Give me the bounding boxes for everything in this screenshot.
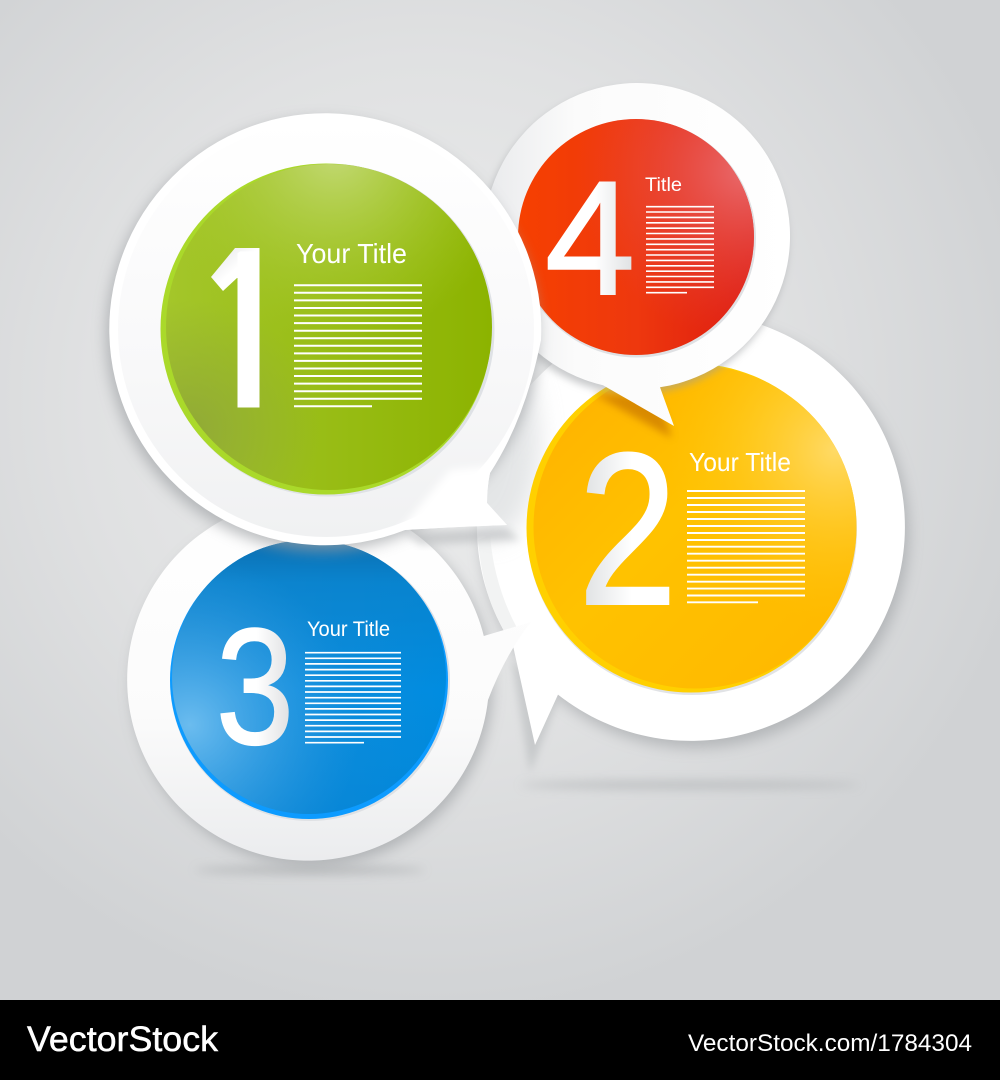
blue disc bbox=[170, 540, 448, 819]
panel: step 1 bubble bbox=[106, 113, 541, 551]
text lines bbox=[294, 285, 422, 406]
inner rim bbox=[518, 120, 756, 358]
drop shadow: step 3 bbox=[132, 506, 492, 866]
number 2: 2 bbox=[578, 409, 677, 651]
number 1 bbox=[211, 248, 260, 408]
number 4: 4 bbox=[545, 148, 635, 329]
floor shadow: step 3 bbox=[195, 866, 425, 874]
tail highlight bbox=[404, 468, 493, 530]
footer bar bbox=[0, 1000, 1000, 1080]
floor shadow: step 2 bbox=[520, 781, 860, 789]
red disc bbox=[518, 119, 754, 355]
number 3: 3 bbox=[216, 595, 294, 779]
bubble shape bbox=[477, 313, 905, 745]
text lines bbox=[646, 207, 714, 293]
watermark url: VectorStock.com/1784304 bbox=[688, 1030, 972, 1057]
bubble shape bbox=[484, 83, 790, 426]
panel: step 3 bubble bbox=[127, 499, 531, 861]
inner rim bbox=[527, 365, 857, 695]
watermark logo: VectorStock bbox=[27, 1020, 219, 1059]
shaded left area bbox=[477, 384, 546, 630]
number 1: 1 bbox=[183, 206, 308, 456]
green disc bbox=[160, 164, 492, 494]
title: Your Title bbox=[689, 447, 791, 477]
title: Your Title bbox=[296, 238, 407, 269]
bubble shape bbox=[127, 499, 531, 861]
title: Title bbox=[645, 174, 682, 196]
yellow disc bbox=[526, 364, 856, 692]
text lines bbox=[305, 653, 401, 743]
ring inner tone bbox=[118, 121, 534, 537]
bubble shape bbox=[109, 113, 541, 545]
title: Your Title bbox=[307, 617, 390, 641]
panel: step 2 bubble bbox=[475, 325, 914, 766]
inner rim bbox=[162, 164, 494, 496]
inner rim bbox=[170, 541, 450, 821]
text lines bbox=[687, 491, 805, 602]
panel: step 4 bubble bbox=[482, 83, 790, 438]
